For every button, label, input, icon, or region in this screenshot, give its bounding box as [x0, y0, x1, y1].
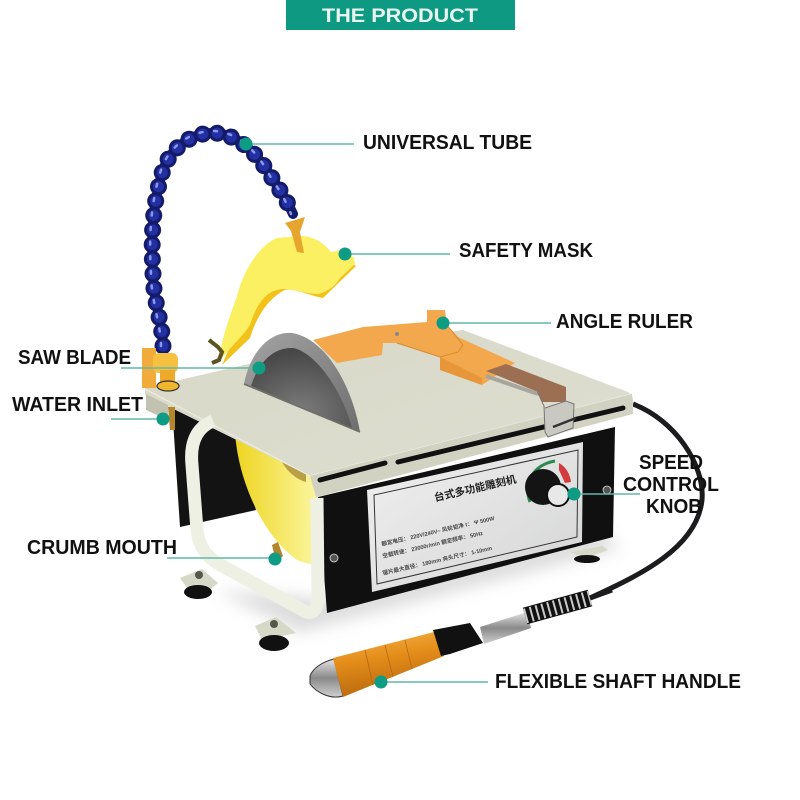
panel screws — [330, 486, 611, 562]
spray nozzle — [285, 217, 305, 253]
steel sleeve — [480, 612, 531, 644]
under table bracket — [146, 394, 168, 420]
left feet — [180, 569, 296, 651]
flexible hose — [150, 131, 293, 346]
cord section — [590, 590, 612, 598]
callout: universal tube — [240, 132, 532, 154]
wing nut — [209, 340, 222, 363]
callout: speed control knob: CONTROL — [623, 474, 719, 496]
black front housing — [318, 427, 615, 613]
callout: water inlet: WATER INLET — [12, 394, 143, 416]
crumb mouth nozzle — [272, 542, 283, 562]
callout: water inlet — [12, 394, 170, 426]
flexible shaft handle — [310, 590, 612, 697]
safety mask — [209, 217, 356, 365]
plate specifications: 额定电压： 220V/240V~ 风轮铝净 t： Ψ 500W — [381, 514, 496, 548]
rear black housing — [172, 405, 256, 527]
yellow hose base — [142, 348, 179, 391]
speed dial — [525, 461, 571, 506]
callout: speed control knob: KNOB — [646, 496, 702, 518]
right foot — [570, 546, 608, 563]
control label plate — [367, 442, 583, 592]
header banner — [286, 0, 515, 30]
table side ventilation slots — [320, 463, 385, 480]
metal clamp — [537, 391, 576, 437]
plate title: 台式多功能雕刻机 — [433, 473, 518, 504]
callout: universal tube: UNIVERSAL TUBE — [363, 132, 532, 154]
plate specifications: 锯片最大直径： 180mm 夹头尺寸： 1-10mm — [382, 544, 493, 577]
spring guard — [525, 598, 590, 616]
white tube frame — [192, 421, 318, 613]
yellow blade guard — [235, 432, 318, 565]
angle ruler fence — [313, 310, 515, 385]
power cord — [590, 404, 702, 598]
callout: saw blade — [18, 347, 266, 374]
callout: speed control knob: SPEED — [639, 452, 703, 474]
callout: crumb mouth — [27, 537, 282, 566]
callout: safety mask — [338, 240, 594, 262]
plate specifications: 空载转速： 23000r/min 额定频率： 50Hz — [382, 529, 484, 560]
black collar — [433, 623, 483, 656]
callout: flexible shaft handle — [374, 671, 741, 693]
machine shadow — [215, 530, 620, 632]
callout: flexible shaft handle: FLEXIBLE SHAFT HANDLE — [495, 671, 741, 693]
callout: speed control knob — [568, 452, 719, 518]
table top — [145, 330, 633, 497]
saw blade — [244, 333, 360, 432]
slide rail — [486, 364, 566, 402]
steel chuck — [310, 659, 343, 697]
header banner: THE PRODUCT — [322, 5, 478, 27]
product: saw machine — [145, 310, 633, 651]
orange grip — [333, 631, 444, 697]
callout: crumb mouth: CRUMB MOUTH — [27, 537, 177, 559]
callout: angle ruler: ANGLE RULER — [556, 311, 694, 333]
plate specifications — [381, 514, 496, 577]
callout: safety mask: SAFETY MASK — [459, 240, 594, 262]
callout: angle ruler — [436, 311, 694, 333]
callout: saw blade: SAW BLADE — [18, 347, 131, 369]
